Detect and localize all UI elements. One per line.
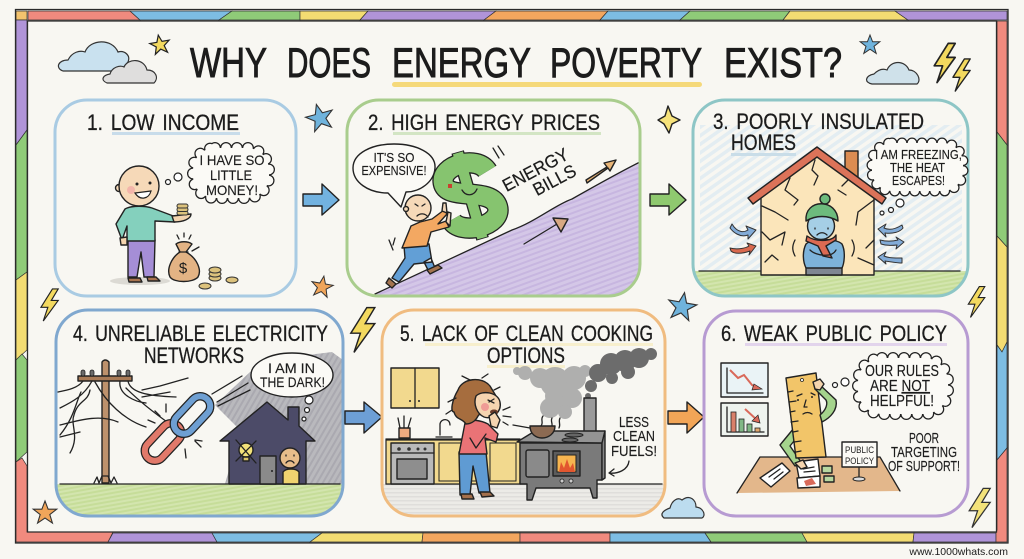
poor targeting note: OF SUPPORT!	[888, 458, 960, 475]
thought bubble: HELPFUL!	[870, 393, 934, 410]
title: POVERTY	[550, 39, 702, 86]
icon: lightning right margin	[968, 287, 985, 317]
heading 6: 6. WEAK PUBLIC POLICY	[721, 321, 947, 346]
heading 5: OPTIONS	[487, 343, 565, 368]
heading 3: 3. POORLY INSULATED	[713, 109, 924, 134]
ruler character	[780, 373, 836, 469]
icon: blue star top right	[860, 35, 880, 53]
panel 4: unreliable electricity networks	[56, 310, 343, 516]
smoke	[513, 348, 657, 428]
poor targeting note: TARGETING	[891, 444, 957, 461]
thought bubble: I AM FREEZING,	[875, 147, 962, 162]
speech bubble: EXPENSIVE!	[362, 163, 426, 178]
arrow 2 to 3	[650, 184, 686, 215]
thought bubble	[872, 143, 963, 215]
heading 5	[400, 321, 653, 368]
icon: grey cloud top left	[103, 61, 156, 83]
thought bubble	[166, 148, 269, 198]
thought bubble: OUR RULES	[865, 363, 939, 380]
icon: yellow sparkle	[658, 106, 680, 133]
title: EXIST?	[724, 39, 842, 86]
heading 4	[73, 321, 328, 368]
heading 2: 2. HIGH ENERGY PRICES	[368, 110, 600, 135]
less clean fuels note: LESS	[619, 414, 649, 431]
panel 1: low income	[55, 100, 296, 296]
cracked house	[748, 147, 886, 275]
energy bills label: ENERGY	[499, 144, 572, 196]
icon: cloud top right	[867, 62, 919, 84]
heading 3	[713, 109, 924, 156]
public policy sign: PUBLIC	[845, 445, 874, 456]
thought bubble	[832, 358, 948, 414]
broken chain	[141, 376, 250, 465]
icon: lightning left margin	[41, 289, 58, 321]
public policy sign	[842, 442, 877, 481]
icon: lightning bottom right	[969, 488, 990, 528]
speech bubble	[251, 353, 333, 421]
utility pole and broken wires	[58, 360, 188, 483]
freezing person	[793, 194, 854, 275]
thought bubble: LITTLE	[210, 167, 252, 183]
declining charts	[721, 363, 768, 436]
panel 2: high energy prices	[347, 100, 640, 300]
website credit: www.1000whats.com	[908, 546, 1008, 558]
hill	[375, 162, 640, 300]
icon: blue star	[303, 101, 336, 133]
speech bubble: THE DARK!	[260, 374, 325, 390]
arrow 5 to 6	[668, 402, 704, 433]
title: DOES	[287, 39, 371, 86]
rising arrows	[524, 160, 616, 244]
thought bubble: THE HEAT	[890, 160, 945, 175]
energy bills label: BILLS	[530, 161, 580, 200]
heading 5: 5. LACK OF CLEAN COOKING	[400, 321, 653, 346]
thought bubble: I HAVE SO	[200, 152, 265, 168]
big dollar sign	[434, 146, 505, 246]
panel 5: lack of clean cooking options	[382, 310, 665, 516]
arrow 4 to 5	[345, 402, 382, 433]
icon: lightning bolts top right	[934, 43, 970, 91]
dark house with person and bulb	[220, 402, 315, 484]
thought bubble: ARE NOT	[870, 378, 930, 395]
heading 1: 1. LOW INCOME	[87, 110, 239, 135]
panel 3: poorly insulated homes	[693, 100, 968, 296]
heading 3: HOMES	[731, 130, 796, 155]
icon: blue cloud top left	[58, 42, 129, 71]
person pushing	[386, 195, 451, 288]
public policy sign: POLICY	[845, 456, 875, 467]
coughing person	[446, 374, 511, 499]
title: WHY	[190, 39, 267, 86]
less clean fuels note: CLEAN	[613, 428, 655, 445]
icon: gold star	[149, 33, 171, 55]
wood stove	[513, 398, 605, 500]
less clean fuels note	[609, 414, 657, 476]
arrow 1 to 2	[303, 184, 339, 215]
icon: blue star center right	[666, 290, 699, 321]
title: ENERGY	[392, 39, 531, 86]
person with coins	[110, 166, 191, 285]
money bag and coins	[169, 233, 238, 289]
desk with papers	[737, 457, 900, 493]
air draught arrows	[730, 224, 904, 264]
icon: lightning center	[351, 308, 375, 352]
speech bubble: I AM IN	[268, 360, 315, 376]
poor targeting note: POOR	[909, 430, 939, 447]
less clean fuels note: FUELS!	[611, 443, 657, 460]
heading 4: NETWORKS	[144, 343, 244, 368]
kitchen	[386, 368, 520, 484]
money bag and coins: $	[179, 260, 188, 277]
energy bills label	[499, 144, 580, 212]
title	[190, 39, 842, 87]
poor targeting note	[888, 430, 960, 475]
thought bubble: ESCAPES!	[892, 173, 945, 188]
thought bubble: MONEY!	[206, 182, 258, 198]
icon: orange star	[310, 274, 335, 298]
icon: blue cloud bottom	[662, 498, 704, 518]
icon: orange star bottom left	[33, 501, 57, 523]
heading 4: 4. UNRELIABLE ELECTRICITY	[73, 321, 328, 346]
speech bubble: IT'S SO	[374, 150, 414, 165]
speech bubble	[353, 144, 435, 207]
panel 6: weak public policy	[704, 311, 968, 516]
